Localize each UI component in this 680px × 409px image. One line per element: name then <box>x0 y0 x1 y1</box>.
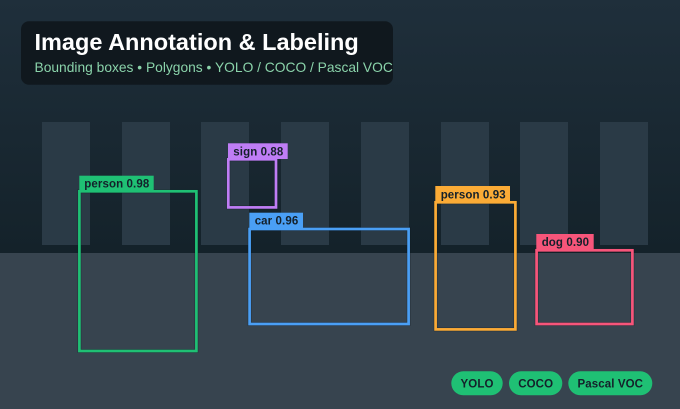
annotation: person 0.93 <box>435 186 515 329</box>
annotation: person 0.98 <box>79 176 196 351</box>
title: Image Annotation & Labeling <box>34 29 359 55</box>
badge: Pascal VOC: Pascal VOC <box>578 378 643 390</box>
badge: Pascal VOC <box>568 371 652 395</box>
badge: COCO <box>509 371 562 395</box>
annotation: dog 0.90 <box>536 234 632 324</box>
annotation: car 0.96 <box>249 213 409 324</box>
subtitle: Bounding boxes • Polygons • YOLO / COCO / Pascal VOC <box>34 60 393 75</box>
badge: COCO: COCO <box>518 378 553 390</box>
annotation: person 0.98: person 0.98 <box>84 178 150 190</box>
annotation: sign 0.88 <box>228 143 288 207</box>
annotation: car 0.96: car 0.96 <box>255 215 298 227</box>
badge: YOLO <box>451 371 503 395</box>
annotation: dog 0.90: dog 0.90 <box>542 237 589 249</box>
annotation: sign 0.88: sign 0.88 <box>233 147 284 159</box>
title panel <box>21 21 393 85</box>
format badges <box>451 371 652 395</box>
annotation: person 0.93: person 0.93 <box>441 189 506 201</box>
badge: YOLO: YOLO <box>460 378 494 390</box>
